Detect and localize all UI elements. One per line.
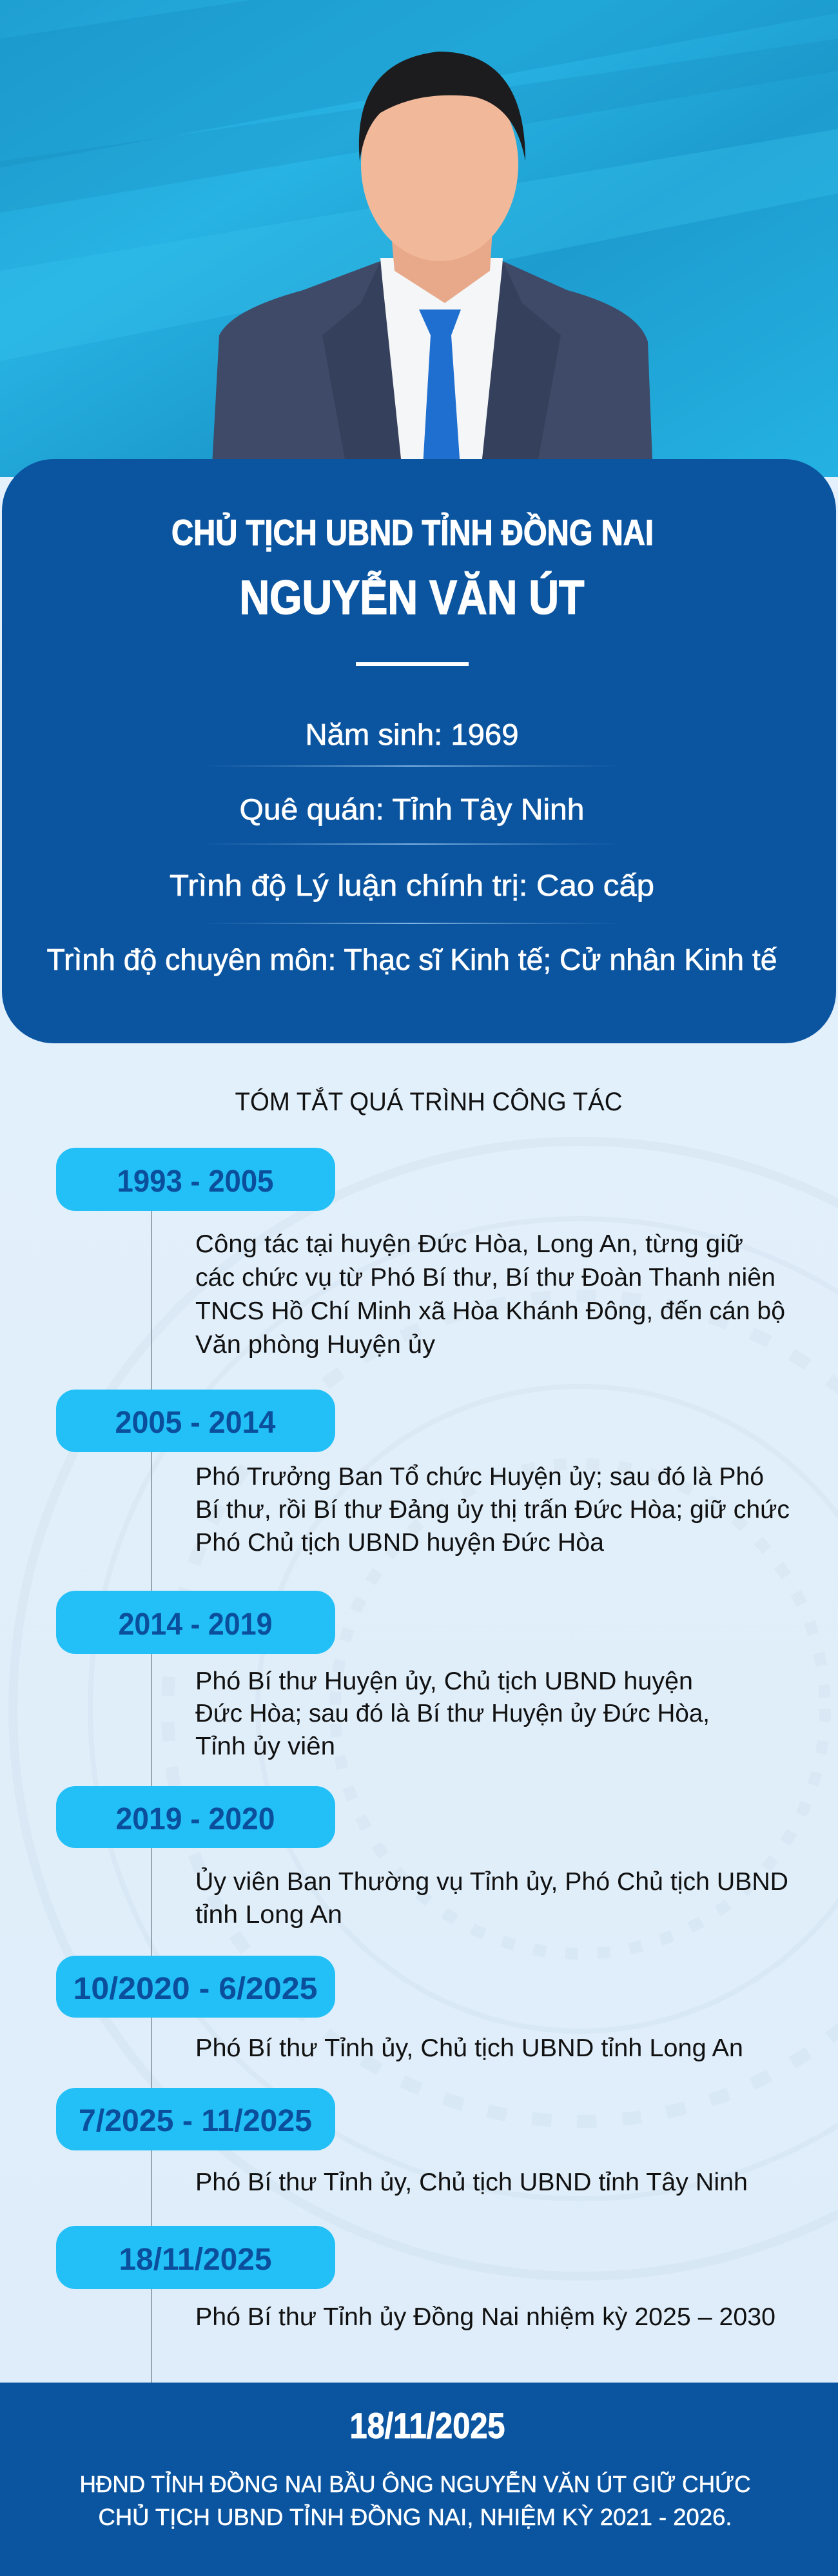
- item 2005-2014: 2005 - 2014: [115, 1406, 276, 1440]
- footer date: 18/11/2025: [349, 2405, 505, 2446]
- shirt: [380, 258, 503, 477]
- timeline line: [151, 1206, 152, 2383]
- item 18/11/2025: [56, 2226, 775, 2331]
- item 2014-2019: [56, 1591, 710, 1760]
- item 10/2020-6/2025: [56, 1956, 743, 2062]
- item 1993-2005: Văn phòng Huyện ủy: [195, 1331, 436, 1359]
- footer text: HĐND TỈNH ĐỒNG NAI BẦU ÔNG NGUYỄN VĂN ÚT GIỮ CHỨC: [80, 2470, 750, 2497]
- info list: Quê quán: Tỉnh Tây Ninh: [240, 792, 584, 826]
- item 2019-2020: tỉnh Long An: [195, 1901, 342, 1929]
- hair: [359, 52, 525, 161]
- item 2014-2019: Đức Hòa; sau đó là Bí thư Huyện ủy Đức Hòa,: [195, 1700, 710, 1727]
- info list: Trình độ chuyên môn: Thạc sĩ Kinh tế; Cử nhân Kinh tế: [46, 943, 777, 976]
- timeline: [56, 1148, 790, 2331]
- heading: timeline: TÓM TẮT QUÁ TRÌNH CÔNG TÁC: [235, 1086, 623, 1116]
- item 10/2020-6/2025: Phó Bí thư Tỉnh ủy, Chủ tịch UBND tỉnh Long An: [195, 2034, 743, 2062]
- footer text: [80, 2470, 750, 2530]
- item 1993-2005: [56, 1148, 785, 1359]
- item 2005-2014: [56, 1390, 790, 1557]
- item 1993-2005: TNCS Hồ Chí Minh xã Hòa Khánh Đông, đến cán bộ: [195, 1297, 785, 1325]
- item 2014-2019: 2014 - 2019: [119, 1608, 272, 1642]
- info list: Trình độ Lý luận chính trị: Cao cấp: [170, 869, 654, 902]
- info list: [46, 718, 777, 976]
- item 1993-2005: các chức vụ từ Phó Bí thư, Bí thư Đoàn Thanh niên: [195, 1264, 775, 1292]
- item 2005-2014: Phó Trưởng Ban Tổ chức Huyện ủy; sau đó là Phó: [195, 1463, 764, 1491]
- item 1993-2005: Công tác tại huyện Đức Hòa, Long An, từng giữ: [195, 1230, 743, 1258]
- item 2014-2019: Phó Bí thư Huyện ủy, Chủ tịch UBND huyện: [195, 1667, 693, 1695]
- item 7/2025-11/2025: 7/2025 - 11/2025: [79, 2104, 312, 2138]
- info list: Năm sinh: 1969: [306, 718, 518, 751]
- item 18/11/2025: Phó Bí thư Tỉnh ủy Đồng Nai nhiệm kỳ 2025 – 2030: [195, 2303, 775, 2331]
- item 18/11/2025: 18/11/2025: [119, 2243, 272, 2277]
- suit: [211, 261, 653, 477]
- heading: name: NGUYỄN VĂN ÚT: [240, 571, 584, 624]
- tie: [419, 310, 461, 477]
- panel: profile: [2, 459, 836, 1043]
- item 7/2025-11/2025: [56, 2088, 748, 2196]
- item 2005-2014: Bí thư, rồi Bí thư Đảng ủy thị trấn Đức Hòa; giữ chức: [195, 1496, 790, 1524]
- item 2014-2019: Tỉnh ủy viên: [195, 1733, 335, 1760]
- neck: [390, 219, 493, 303]
- lower background: [0, 451, 838, 2386]
- photo: header background with portrait: [0, 0, 838, 477]
- item 10/2020-6/2025: 10/2020 - 6/2025: [73, 1972, 317, 2006]
- heading: position: CHỦ TỊCH UBND TỈNH ĐỒNG NAI: [171, 512, 654, 553]
- item 2019-2020: [56, 1786, 788, 1929]
- item 1993-2005: 1993 - 2005: [117, 1165, 273, 1199]
- item 2019-2020: 2019 - 2020: [116, 1802, 275, 1836]
- face: [361, 68, 518, 261]
- item 2005-2014: Phó Chủ tịch UBND huyện Đức Hòa: [195, 1529, 604, 1557]
- lapels: [322, 261, 403, 477]
- footer: [0, 2383, 838, 2576]
- footer text: CHỦ TỊCH UBND TỈNH ĐỒNG NAI, NHIỆM KỲ 2021 - 2026.: [98, 2503, 732, 2530]
- item 7/2025-11/2025: Phó Bí thư Tỉnh ủy, Chủ tịch UBND tỉnh Tây Ninh: [195, 2168, 748, 2196]
- item 2019-2020: Ủy viên Ban Thường vụ Tỉnh ủy, Phó Chủ tịch UBND: [195, 1867, 788, 1896]
